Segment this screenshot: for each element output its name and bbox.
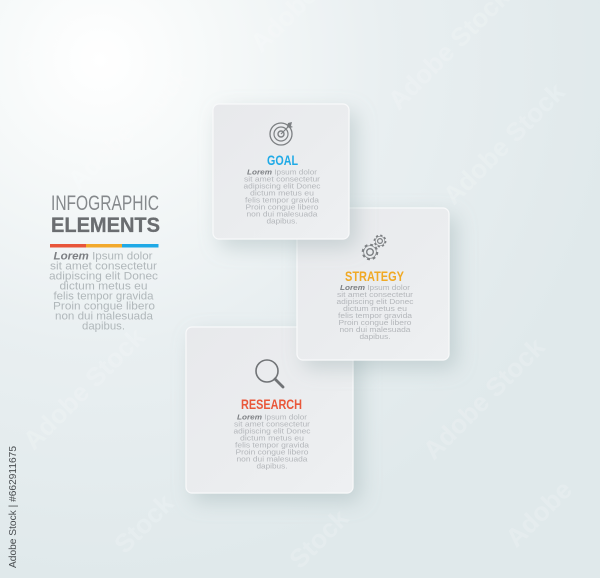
text block: research body: sit amet consectetur: [234, 420, 311, 428]
text block: research body: non dui malesuada: [236, 454, 308, 464]
text block: intro paragraph: felis tempor gravida: [54, 290, 154, 302]
text block: intro paragraph: dapibus.: [82, 320, 125, 332]
text block: strategy body: adipiscing elit Donec: [336, 297, 414, 306]
panel: research card: [186, 327, 353, 493]
icon: magnifying glass: [256, 360, 283, 387]
text block: strategy body: sit amet consectetur: [337, 290, 414, 299]
infographic canvas: Stock: [283, 503, 355, 574]
text block: intro paragraph: dictum metus eu: [60, 280, 148, 292]
text block: goal body: sit amet consectetur: [244, 174, 321, 184]
text block: strategy body: dictum metus eu: [343, 304, 407, 313]
heading: goal: GOAL: [267, 152, 298, 168]
panel: strategy card: [297, 208, 449, 360]
infographic canvas: Adobe Stock: [62, 61, 196, 195]
text block: intro paragraph: non dui malesuada: [55, 310, 153, 322]
heading: strategy: STRATEGY: [345, 268, 405, 284]
infographic canvas: Adobe Stock: [17, 321, 151, 455]
text block: goal body: non dui malesuada: [246, 210, 318, 218]
text block: research body: felis tempor gravida: [235, 440, 310, 450]
heading: research: RESEARCH: [241, 396, 302, 412]
text block: goal body: dapibus.: [266, 216, 298, 226]
text block: research body: Proin congue libero: [236, 448, 308, 456]
title: elements: ELEMENTS: [51, 214, 160, 237]
text block: strategy body: dapibus.: [360, 332, 390, 341]
text block: intro paragraph: Lorem Ipsum dolor: [54, 250, 153, 262]
text block: goal body: adipiscing elit Donec: [244, 182, 321, 190]
text block: goal body: Lorem Ipsum dolor: [247, 168, 317, 176]
infographic canvas: Stock: [108, 488, 180, 559]
text block: strategy body: [336, 283, 414, 341]
icon: target: [270, 122, 293, 145]
infographic canvas: Adobe Stock: [417, 331, 551, 465]
text block: intro paragraph: sit amet consectetur: [50, 260, 158, 272]
infographic canvas: Adobe: [499, 474, 578, 553]
text block: strategy body: Proin congue libero: [338, 318, 412, 327]
infographic canvas: Stock: [13, 3, 85, 74]
text block: strategy body: Lorem Ipsum dolor: [340, 283, 410, 292]
panel: goal card: [213, 104, 349, 239]
text block: research body: dictum metus eu: [240, 434, 304, 442]
text block: research body: dapibus.: [256, 462, 288, 470]
infographic canvas: Adobe Stock: [437, 76, 571, 210]
text block: goal body: [244, 168, 321, 226]
text block: intro paragraph: adipiscing elit Donec: [49, 270, 159, 282]
text block: goal body: felis tempor gravida: [245, 196, 320, 204]
text block: intro paragraph: Proin congue libero: [53, 300, 155, 312]
text block: research body: Lorem Ipsum dolor: [237, 412, 307, 422]
text block: strategy body: felis tempor gravida: [338, 311, 413, 320]
title: infographic: INFOGRAPHIC: [51, 192, 159, 215]
title block: [50, 192, 160, 248]
text block: strategy body: non dui malesuada: [340, 325, 411, 334]
text block: research body: adipiscing elit Donec: [234, 426, 311, 436]
text block: goal body: Proin congue libero: [246, 202, 318, 212]
text block: research body: [234, 412, 311, 470]
text block: goal body: dictum metus eu: [250, 188, 314, 198]
tricolour divider: [50, 244, 158, 248]
icon: gears: [363, 235, 386, 259]
text block: intro paragraph: [49, 250, 159, 332]
watermark credit: Adobe Stock | #662911675: [7, 446, 19, 568]
